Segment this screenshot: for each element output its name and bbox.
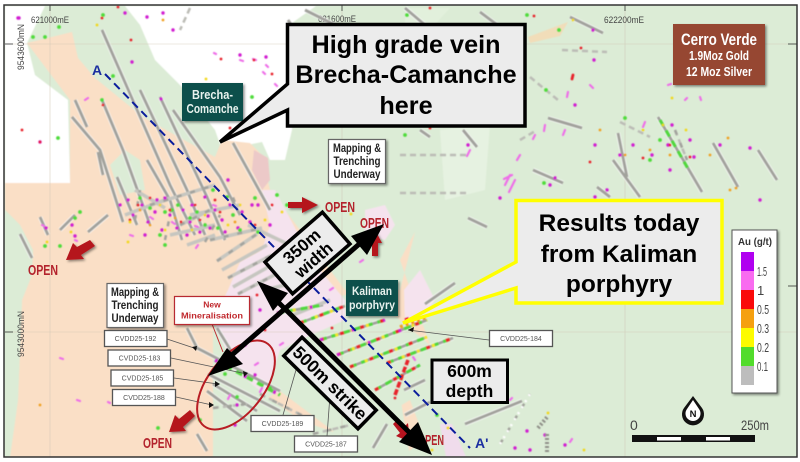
open labels: OPEN [418, 432, 444, 449]
legend: gold grade [732, 230, 777, 393]
label: mapping and trenching, north: Mapping & [333, 141, 381, 155]
arrow: open west [66, 240, 95, 260]
callout: 500m strike: 500m strike [289, 342, 372, 424]
label: CVDD25-188: CVDD25-188 [123, 395, 165, 402]
legend: gold grade: 1 [757, 283, 764, 298]
label: Brecha-Comanche [182, 83, 243, 121]
callout: 350m width [265, 212, 350, 294]
coordinate labels: 621000mE [31, 15, 69, 26]
label: CVDD25-192 [104, 330, 167, 346]
legend: gold grade: 1.5 [757, 264, 767, 279]
legend: gold grade: 0.5 [757, 302, 769, 317]
open labels: OPEN [28, 262, 58, 279]
label: CVDD25-185 [111, 370, 174, 386]
label: CVDD25-187 [294, 436, 358, 452]
legend: gold grade: 0.1 [757, 359, 768, 374]
section labels A and A' [92, 62, 488, 451]
callout: 600m depth: depth [446, 381, 493, 401]
open labels: OPEN [360, 215, 389, 232]
open labels [28, 199, 444, 452]
callout: high grade vein: here [379, 92, 433, 120]
label: CVDD25-189: CVDD25-189 [262, 421, 303, 428]
callout: 600m depth [432, 360, 508, 402]
cross section line A to A' [105, 74, 470, 448]
scale bar: 0 [630, 417, 638, 433]
arrow: open east [288, 197, 318, 213]
open labels: OPEN [143, 435, 172, 452]
label: mapping and trenching, south west [107, 284, 164, 328]
scale bar: 250m [741, 417, 769, 433]
callout: 350m width: width [290, 238, 337, 283]
vertical drill cluster, south east [538, 416, 548, 454]
dense white-grey fan of holes [125, 185, 330, 315]
assay dots: yellow and orange [47, 20, 686, 450]
legend: gold grade: 0.3 [757, 321, 769, 336]
coordinate labels: 622200mE [604, 15, 644, 26]
callout: 600m depth: 600m [447, 361, 492, 381]
label: mapping and trenching, south west: Trenching [112, 298, 158, 312]
arrow: open south west [169, 410, 195, 432]
label: mapping and trenching, south west: Mapping & [111, 285, 159, 299]
coordinate labels: 9543600mN [16, 24, 27, 70]
open labels: OPEN [325, 199, 355, 216]
legend: gold grade: Au (g/t) [738, 236, 772, 248]
callout: Kaliman results: from Kaliman [541, 241, 697, 268]
callout: Kaliman results: Results today [539, 210, 700, 237]
label: Kaliman porphyry: Kaliman [352, 284, 392, 298]
label: Brecha-Comanche: Comanche [186, 102, 239, 116]
label: mapping and trenching, north: Underway [334, 167, 381, 181]
map geology zones [5, 6, 568, 457]
resource box: Cerro Verde: 12 Moz Silver [686, 65, 752, 79]
assay dots: pink [42, 28, 701, 442]
label: CVDD25-188 [112, 390, 176, 406]
section labels A and A': A' [475, 435, 488, 451]
callout: 350m width: 350m [279, 225, 325, 268]
red ellipse: new mineralisation zone [182, 327, 290, 443]
callout: high grade vein [220, 24, 525, 142]
arrow: 500m strike dimension [257, 281, 432, 455]
mineralised intervals along Kaliman holes [215, 120, 690, 395]
drill hole leader lines [167, 327, 489, 436]
callout: Kaliman results: porphyry [566, 271, 672, 298]
label: CVDD25-183 [108, 350, 170, 366]
label: mapping and trenching, north [328, 140, 386, 184]
icon: north arrow: N [690, 409, 697, 420]
callout: new mineralisation [174, 296, 250, 352]
coordinate labels [16, 14, 644, 357]
arrow: open north [368, 230, 382, 256]
legend: gold grade: 0.2 [757, 340, 769, 355]
assay dots: green [33, 15, 660, 428]
callout: Kaliman results [403, 200, 722, 323]
resource box: Cerro Verde: Cerro Verde [681, 30, 757, 49]
callout: high grade vein: Brecha-Camanche [295, 61, 517, 89]
scale bar [630, 417, 769, 442]
callout: high grade vein: High grade vein [312, 31, 500, 59]
label: CVDD25-189 [251, 416, 314, 432]
coordinate labels: 9543000mN [16, 311, 27, 357]
icon: north arrow [682, 396, 704, 425]
label: CVDD25-187: CVDD25-187 [305, 442, 347, 448]
section labels A and A': A [92, 62, 102, 78]
label: Brecha-Comanche: Brecha- [192, 88, 233, 102]
label: mapping and trenching, north: Trenching [334, 154, 380, 168]
assay dots: red [22, 7, 690, 398]
label: CVDD25-185: CVDD25-185 [122, 376, 163, 382]
label: CVDD25-192: CVDD25-192 [115, 336, 156, 343]
arrow: 350m width dimension [208, 224, 384, 376]
label: CVDD25-184: CVDD25-184 [500, 336, 542, 343]
callout: new mineralisation: Mineralisation [181, 310, 243, 320]
label: Kaliman porphyry: porphyry [349, 298, 395, 312]
label: CVDD25-183: CVDD25-183 [119, 356, 160, 362]
callout: new mineralisation: New [203, 300, 221, 310]
resource box: Cerro Verde [673, 24, 765, 85]
coordinate labels: 621600mE [318, 14, 356, 25]
label: Kaliman porphyry [346, 280, 398, 316]
arrow: open south east [393, 419, 410, 442]
drill hole labels [104, 330, 552, 452]
label: CVDD25-184 [490, 330, 552, 346]
resource box: Cerro Verde: 1.9Moz Gold [689, 49, 749, 63]
label: mapping and trenching, south west: Underway [112, 311, 159, 325]
